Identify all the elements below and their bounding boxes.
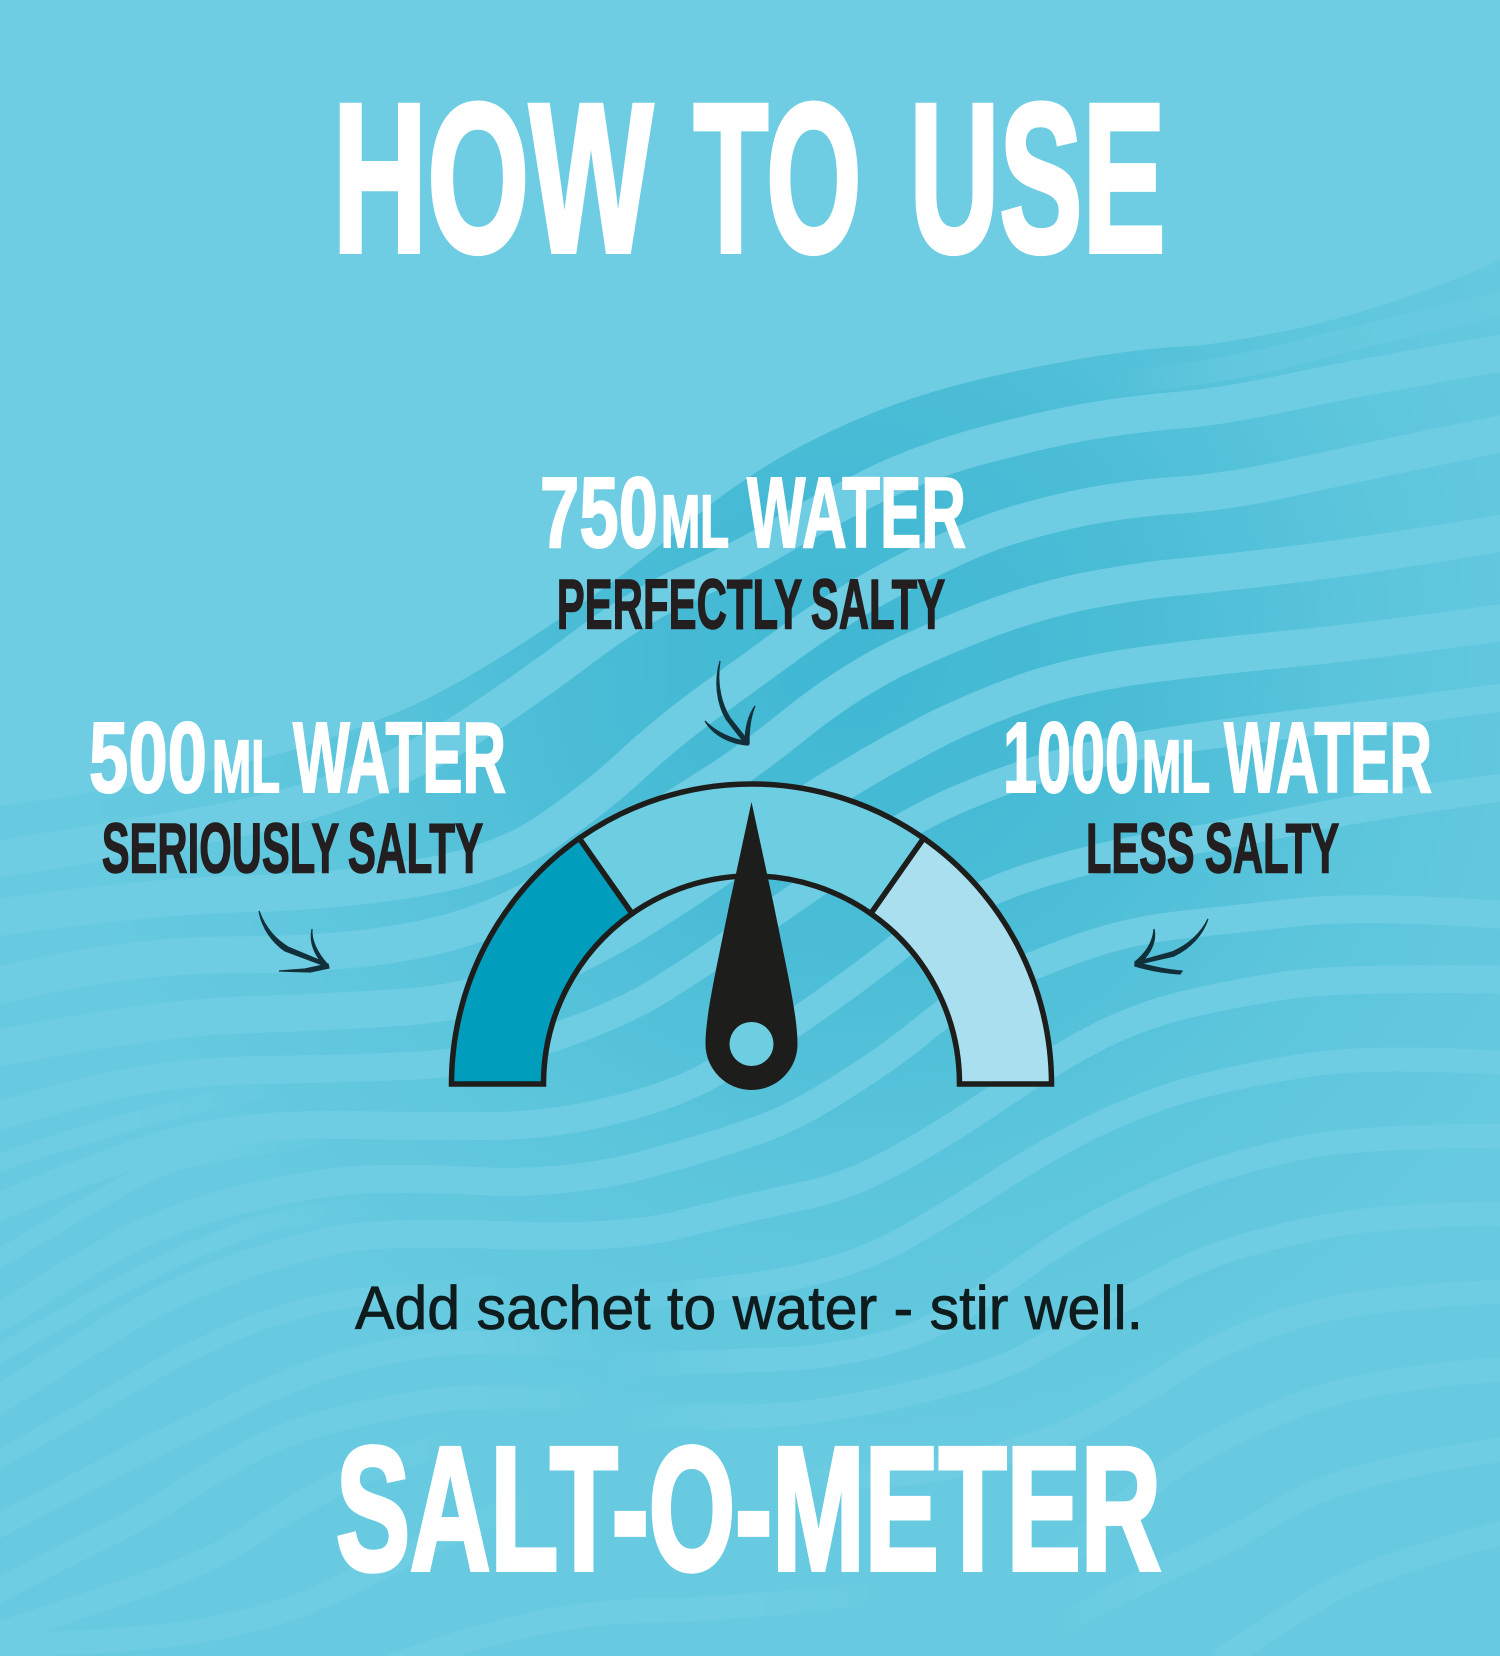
gauge segment: seriously salty — [452, 838, 632, 1084]
label: 750ml water — [540, 457, 966, 569]
arrow: to middle segment — [705, 661, 755, 745]
label: 750ml water: 750 — [540, 457, 658, 569]
label: 500ml water: ML — [212, 725, 280, 808]
label: seriously salty: SALTY — [348, 808, 483, 887]
label: 750ml water: WATER — [747, 457, 966, 569]
gauge needle — [706, 802, 798, 1090]
label: 500ml water: WATER — [293, 702, 506, 814]
title: how to use: TO — [694, 60, 862, 298]
gauge segment: perfectly salty — [579, 784, 924, 914]
gauge segment: less salty — [871, 838, 1052, 1084]
gauge — [452, 784, 1052, 1084]
title: how to use — [332, 60, 1166, 298]
label: 500ml water — [89, 702, 506, 814]
label: 500ml water: 500 — [89, 702, 207, 814]
label: 1000ml water: 1000 — [1003, 702, 1139, 814]
arrow: to right segment — [1135, 919, 1208, 974]
label: less salty: SALTY — [1205, 808, 1339, 887]
label: 750ml water: ML — [661, 480, 729, 563]
title: how to use: HOW — [332, 60, 653, 298]
label: 1000ml water — [1003, 702, 1432, 814]
arrow: to left segment — [259, 911, 329, 972]
label: seriously salty: SERIOUSLY — [102, 808, 339, 887]
label: perfectly salty: SALTY — [811, 564, 945, 643]
instruction text: Add sachet to water - stir well. — [355, 1274, 1143, 1342]
label: 1000ml water: ML — [1142, 725, 1210, 808]
label: perfectly salty: PERFECTLY — [557, 564, 802, 643]
label: less salty: LESS — [1086, 808, 1195, 887]
title: how to use: USE — [910, 60, 1166, 298]
